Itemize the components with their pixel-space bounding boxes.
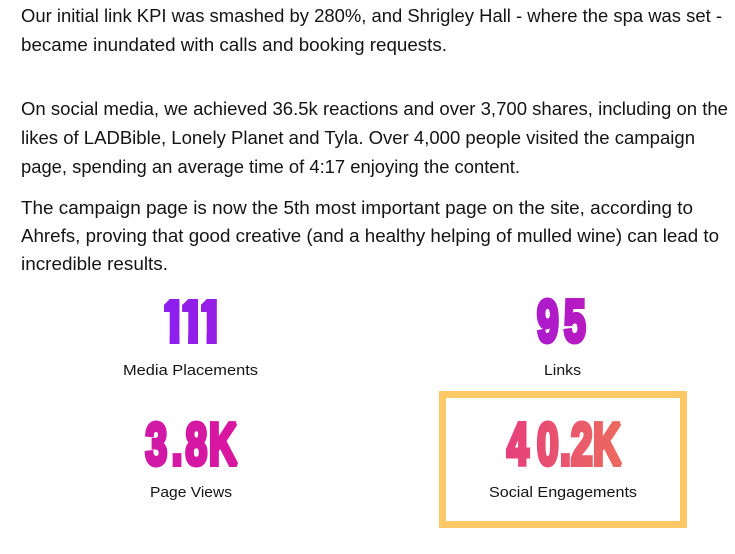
paragraph: campaign page: Ahrefs, proving that good creative (and a healthy helping of mulled wine) can lead to: [21, 226, 719, 246]
paragraph: social media: On social media, we achieved 36.5k reactions and over 3,700 shares, including on the: [21, 99, 728, 119]
paragraph: social media: page, spending an average time of 4:17 enjoying the content.: [21, 157, 520, 177]
stat: media placements: [124, 299, 258, 375]
highlight box: social engagements: [442, 394, 684, 524]
paragraph: campaign page: The campaign page is now the 5th most important page on the site, according to: [21, 198, 693, 218]
paragraph: link KPI: became inundated with calls and booking requests.: [21, 35, 447, 55]
stat: page views: 3.8K: [146, 411, 237, 477]
stat: media placements: 111: [156, 285, 230, 358]
paragraph: social media: likes of LADBible, Lonely Planet and Tyla. Over 4,000 people visited the campaign: [21, 128, 695, 148]
paragraph: link KPI: [21, 6, 722, 55]
paragraph: campaign page: incredible results.: [21, 254, 168, 274]
highlight box: social engagements: Social Engagements: [489, 484, 637, 501]
stat: links: Links: [544, 362, 581, 379]
stat: page views: Page Views: [150, 484, 232, 501]
stat: media placements: Media Placements: [123, 362, 258, 379]
stat: links: 95: [537, 288, 586, 354]
paragraph: social media: [21, 99, 728, 177]
paragraph: campaign page: [21, 198, 719, 274]
highlight box: social engagements: 40.2K: [507, 411, 621, 477]
paragraph: link KPI: Our initial link KPI was smashed by 280%, and Shrigley Hall - where the spa was set -: [21, 6, 722, 26]
